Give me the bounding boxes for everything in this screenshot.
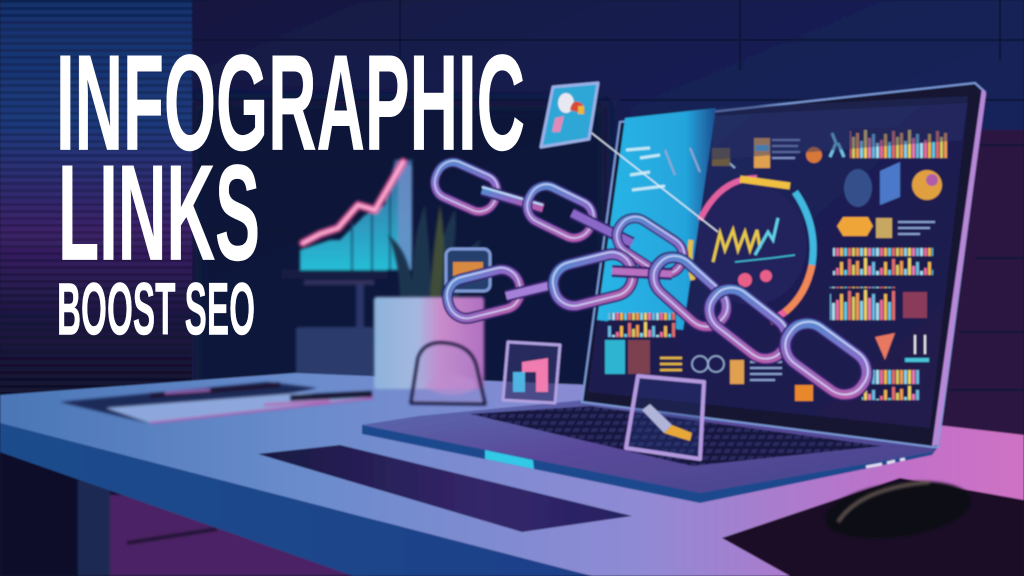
growth chart on shelf <box>282 160 412 330</box>
chain: lower <box>443 248 876 403</box>
title: LINKS <box>58 136 260 288</box>
glowing trend line <box>303 162 403 243</box>
screen top glare <box>710 96 968 160</box>
desk pad <box>258 445 632 532</box>
laptop <box>362 83 986 503</box>
title: BOOST SEO <box>57 268 255 350</box>
laptop base <box>362 400 940 503</box>
background wall <box>0 0 1024 450</box>
floating icon: top card <box>541 83 598 147</box>
chain: upper <box>429 155 691 281</box>
glasses on desk <box>411 343 485 404</box>
window blinds <box>0 0 192 400</box>
floating icon: small card <box>446 249 490 291</box>
notebook and pens <box>60 382 373 423</box>
circular chart <box>690 178 813 322</box>
mouse pad and mouse <box>722 473 1024 576</box>
connector line <box>561 109 718 232</box>
floating icon: colour blocks card <box>503 342 560 403</box>
under-desk cabinet <box>0 440 370 576</box>
laptop lid bezel <box>582 83 985 447</box>
pen cup <box>374 297 484 389</box>
plant <box>388 205 480 298</box>
cyan screen panel <box>597 108 716 330</box>
keyboard <box>470 406 882 466</box>
floating icon: brush card <box>626 376 704 459</box>
dark block on desk <box>296 327 374 382</box>
cyan light bar <box>485 450 534 469</box>
desk <box>0 373 1024 576</box>
handwritten scribble <box>713 230 760 262</box>
ports <box>866 459 905 467</box>
laptop screen <box>590 103 968 428</box>
scene: laptop on a desk with chain links: INFOGRAPHIC <box>56 26 525 178</box>
title <box>56 26 525 350</box>
screen widgets <box>605 133 942 401</box>
infographic bars <box>608 128 947 400</box>
